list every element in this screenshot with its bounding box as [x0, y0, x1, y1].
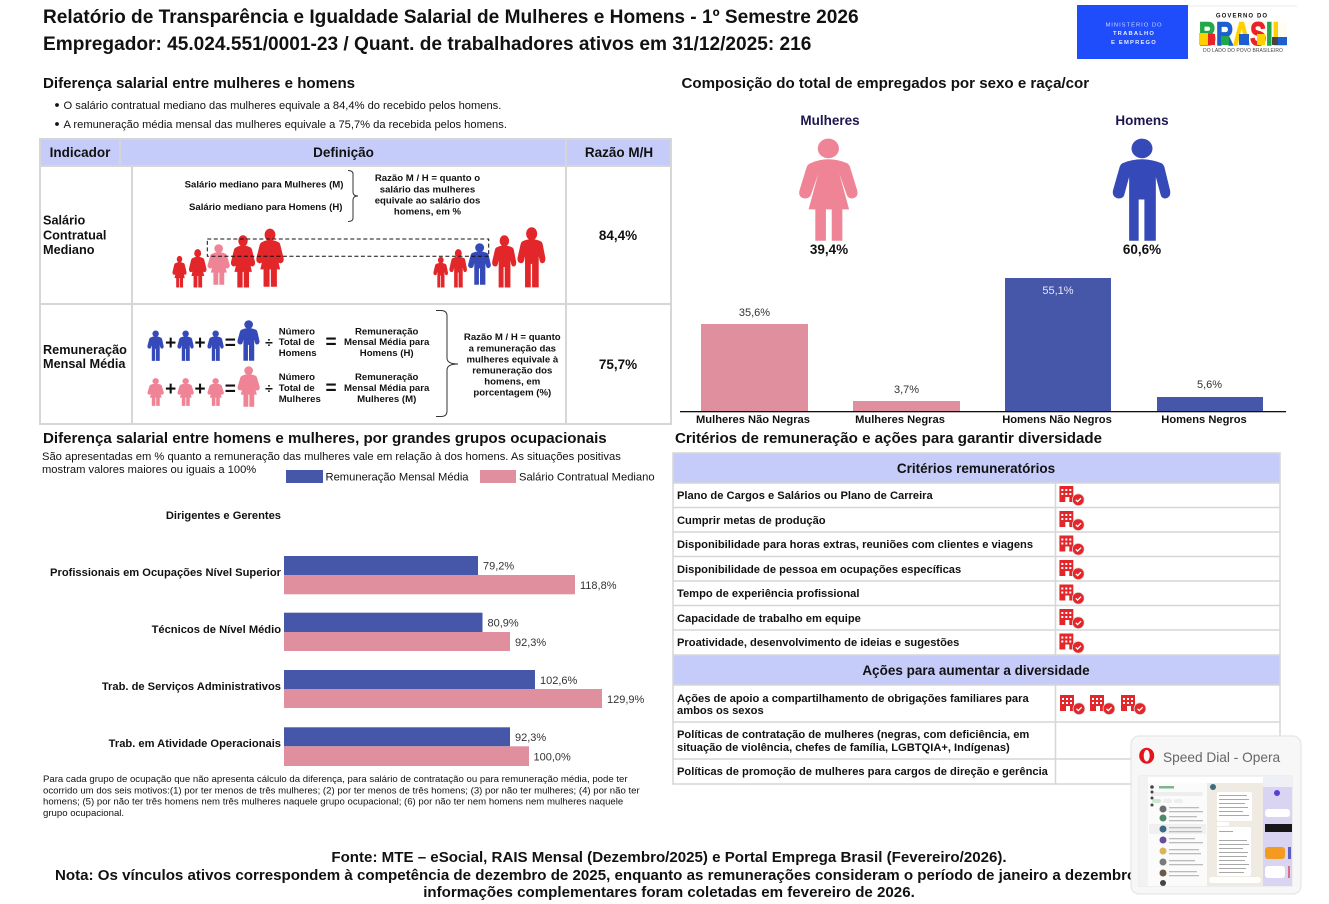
window title: Speed Dial - Opera [1163, 750, 1281, 765]
bar: mulheres negras: Mulheres Negras [855, 414, 945, 426]
brace: remuneration [436, 310, 458, 416]
bar: homens não negros [1002, 278, 1112, 426]
criterion rows: Disponibilidade para horas extras, reuniões com clientes e viagens [677, 539, 1033, 551]
criterion rows: Plano de Cargos e Salários ou Plano de Carreira [677, 490, 934, 502]
logo: Ministério do Trabalho e Emprego: E EMPREGO [1111, 40, 1157, 46]
formula: women: + [165, 379, 176, 400]
icons: men ranked by salary [434, 228, 545, 287]
formula: women: Número [279, 372, 315, 383]
footnote: grupo ocupacional. [43, 808, 124, 819]
panel: women total: Mulheres [800, 113, 860, 128]
category: profissionais: 118,8% [580, 580, 617, 592]
intro text: occupational groups [42, 451, 621, 476]
bar: mulheres não negras: Mulheres Não Negras [696, 414, 810, 426]
formula: women: Total de [279, 383, 315, 394]
formula: men: = [325, 332, 337, 353]
intro text: occupational groups: São apresentadas em % quanto a remuneração das mulheres vale em relação à dos homens. As situações positivas [42, 451, 621, 463]
heading: critérios: Critérios de remuneração e ações para garantir diversidade [675, 430, 1102, 447]
legend: Salário Contratual Mediano [519, 472, 655, 484]
table header: Indicador [50, 145, 111, 160]
criterion rows: Disponibilidade de pessoa em ocupações específicas [677, 564, 961, 576]
panel: indicator table [40, 139, 671, 424]
logo: Governo do Brasil: BRASIL [1199, 16, 1287, 52]
category: serviços administrativos: Trab. de Serviços Administrativos [102, 681, 281, 693]
remuneration value: 75,7% [599, 357, 637, 372]
action icons [1060, 695, 1146, 715]
header: critérios remuneratórios [673, 453, 1280, 483]
category: atividade operacional [109, 727, 571, 766]
criterion rows: Cumprir metas de produção [677, 515, 826, 527]
criterion rows: Capacidade de trabalho em equipe [677, 613, 861, 625]
panel: criteria table [673, 453, 1280, 784]
median value: 84,4% [599, 228, 637, 243]
heading: diferença salarial: Diferença salarial entre mulheres e homens [43, 75, 355, 92]
icons: women ranked by salary [173, 229, 283, 287]
icon: Opera logo [1139, 748, 1154, 764]
table header [40, 139, 671, 166]
header: critérios remuneratórios: Critérios remuneratórios [897, 461, 1055, 476]
category: serviços administrativos: 102,6% [540, 675, 578, 687]
category: atividade operacional: 100,0% [534, 752, 571, 764]
bar: mulheres negras: 3,7% [894, 384, 919, 396]
formula: women: Remuneração [355, 372, 419, 383]
action rows: ambos os sexos [677, 705, 764, 717]
bar chart: occupational groups [50, 510, 645, 766]
row label: salário contratual mediano: Mediano [43, 243, 95, 257]
key findings bullets [55, 100, 507, 131]
action rows: situação de violência, chefes de família, LGBTQIA+, Indígenas) [677, 742, 1010, 754]
footnote: ocorrido um dos seis motivos:(1) por ter menos de três mulheres; (2) por ter menos de três homens; (3) por não ter mulheres; (4) por não ter [43, 785, 640, 796]
median ratio definition: homens, em % [394, 206, 462, 217]
title: Relatório de Transparência e Igualdade Salarial de Mulheres e Homens - 1º Semestre 2026 [43, 7, 859, 28]
median ratio definition: Razão M / H = quanto o [375, 173, 480, 184]
header: ações: Ações para aumentar a diversidade [862, 663, 1090, 678]
title: Empregador: 45.024.551/0001-23 / Quant. de trabalhadores ativos em 31/12/2025: 216 [43, 34, 811, 55]
logo: Ministério do Trabalho e Emprego: TRABALHO [1113, 31, 1155, 37]
legend: Remuneração Mensal Média [326, 472, 469, 484]
bar: mulheres não negras [696, 307, 810, 426]
panel: women total [799, 113, 860, 257]
logo: Ministério do Trabalho e Emprego [1077, 5, 1188, 59]
formula: women [148, 367, 430, 406]
bar: homens negros: Homens Negros [1161, 414, 1247, 426]
median salary definition text: Salário mediano para Mulheres (M) [185, 179, 344, 190]
panel: men total: 60,6% [1123, 242, 1161, 257]
criterion rows: Tempo de experiência profissional [677, 588, 859, 600]
category: técnicos: 92,3% [515, 637, 546, 649]
bar: mulheres não negras: 35,6% [739, 307, 770, 319]
row label: salário contratual mediano: Salário [43, 214, 86, 228]
category: técnicos [152, 613, 546, 651]
formula: men: ÷ [265, 334, 273, 350]
category: atividade operacional: 92,3% [515, 732, 546, 744]
row label: remuneração mensal média: Mensal Média [43, 357, 126, 371]
window thumbnail [1139, 776, 1292, 886]
key findings bullets: A remuneração média mensal das mulheres equivale a 75,7% da recebida pelos homens. [64, 119, 507, 131]
formula: men: Total de [279, 337, 315, 348]
logo: Ministério do Trabalho e Emprego: MINISTÉRIO DO [1105, 22, 1163, 28]
category: profissionais: 79,2% [483, 560, 514, 572]
formula: women: ÷ [265, 380, 273, 396]
table header: Definição [313, 145, 374, 160]
bar chart: sex and race composition [680, 278, 1286, 426]
brace: median [348, 170, 358, 222]
title [43, 7, 859, 55]
row label: salário contratual mediano: Contratual [43, 228, 106, 242]
median ratio definition [375, 173, 480, 217]
dashed median comparison box [207, 239, 489, 256]
category: serviços administrativos: 129,9% [607, 694, 645, 706]
bar: homens negros [1157, 379, 1263, 426]
formula: women: = [325, 378, 337, 399]
bar: homens não negros: 55,1% [1042, 285, 1074, 297]
logo: Governo do Brasil [1188, 5, 1297, 59]
median ratio definition: equivale ao salário dos [375, 195, 480, 206]
category: profissionais [50, 556, 617, 594]
formula: men: Mensal Média para [344, 337, 430, 348]
row label: remuneração mensal média [43, 343, 127, 371]
footnote: Para cada grupo de ocupação que não apresenta cálculo da diferença, para salário de contratação ou para remuneração média, pode ter [43, 774, 628, 785]
logo: Governo do Brasil: DO LADO DO POVO BRASILEIRO [1203, 48, 1283, 54]
row label: salário contratual mediano [43, 214, 106, 257]
panel: men total: Homens [1115, 113, 1169, 128]
median salary definition text: Salário mediano para Homens (H) [189, 202, 342, 213]
formula: women: = [225, 379, 236, 400]
criterion rows [677, 490, 1033, 649]
table header: Razão M/H [585, 145, 653, 160]
source note [55, 849, 1223, 901]
criterion icons [1059, 486, 1085, 654]
logo: Governo do Brasil: GOVERNO DO [1216, 14, 1268, 20]
bar: mulheres negras [853, 384, 960, 426]
formula: women: Mulheres (M) [357, 394, 416, 405]
remuneration ratio definition: Razão M / H = quanto [464, 332, 561, 343]
category: profissionais: Profissionais em Ocupações Nível Superior [50, 567, 282, 579]
action rows: Políticas de contratação de mulheres (negras, com deficiência, em [677, 729, 1029, 741]
key findings bullets: O salário contratual mediano das mulheres equivale a 84,4% do recebido pelos homens. [64, 100, 501, 112]
action rows: Ações de apoio a compartilhamento de obrigações familiares para [677, 693, 1029, 705]
panel: men total [1113, 113, 1170, 257]
remuneration ratio definition: porcentagem (%) [473, 387, 551, 398]
formula: men: Remuneração [355, 326, 419, 338]
category: técnicos: 80,9% [488, 618, 519, 630]
remuneration ratio definition: remuneração dos [472, 365, 552, 376]
heading: occupational groups: Diferença salarial entre homens e mulheres, por grandes grupos ocupacionais [43, 430, 607, 447]
action rows: Políticas de promoção de mulheres para cargos de direção e gerência [677, 766, 1049, 778]
legend [286, 470, 655, 484]
footnote: homens; (5) por não ter três homens nem três mulheres naquele grupo ocupacional; (6) por não ter nem homens nem mulheres naquele [43, 796, 623, 807]
remuneration ratio definition: a remuneração das [469, 343, 556, 354]
remuneration ratio definition: mulheres equivale à [466, 354, 559, 365]
formula: men: + [194, 333, 206, 354]
source note: informações complementares foram coletadas em fevereiro de 2026. [423, 884, 915, 901]
formula: men: Homens (H) [360, 348, 414, 359]
category: dirigentes e gerentes: Dirigentes e Gerentes [166, 510, 281, 522]
formula: men: Homens [279, 348, 317, 359]
source note: Fonte: MTE – eSocial, RAIS Mensal (Dezembro/2025) e Portal Emprega Brasil (Fevereiro/2026). [331, 849, 1007, 866]
formula: women: Mulheres [279, 394, 321, 405]
footnote [43, 774, 640, 819]
formula: women: + [194, 379, 206, 400]
category: técnicos: Técnicos de Nível Médio [152, 624, 281, 636]
median ratio definition: salário das mulheres [380, 184, 475, 195]
row label: remuneração mensal média: Remuneração [43, 343, 127, 357]
formula: women: Mensal Média para [344, 383, 430, 394]
median salary definition text [185, 179, 344, 213]
panel: women total: 39,4% [810, 242, 848, 257]
formula: men [148, 321, 430, 360]
criterion rows: Proatividade, desenvolvimento de ideias e sugestões [677, 637, 959, 649]
category: atividade operacional: Trab. em Atividade Operacionais [109, 738, 281, 750]
formula: men: Número [279, 326, 315, 338]
formula: men: = [225, 333, 236, 354]
remuneration ratio definition: homens, em [484, 376, 540, 387]
heading: composição: Composição do total de empregados por sexo e raça/cor [682, 75, 1089, 92]
bar: homens não negros: Homens Não Negros [1002, 414, 1112, 426]
source note: Nota: Os vínculos ativos correspondem à competência de dezembro de 2025, enquanto as remunerações consideram o período de janeiro a dezembro de 2025. As [55, 867, 1223, 884]
header: ações [673, 655, 1280, 685]
category: serviços administrativos [102, 670, 645, 708]
panel: Opera window preview [1131, 736, 1301, 894]
bar: homens negros: 5,6% [1197, 379, 1222, 391]
action rows [677, 693, 1049, 778]
remuneration ratio definition [464, 332, 561, 398]
intro text: occupational groups: mostram valores maiores ou iguais a 100% [42, 464, 256, 476]
formula: men: + [165, 333, 176, 354]
